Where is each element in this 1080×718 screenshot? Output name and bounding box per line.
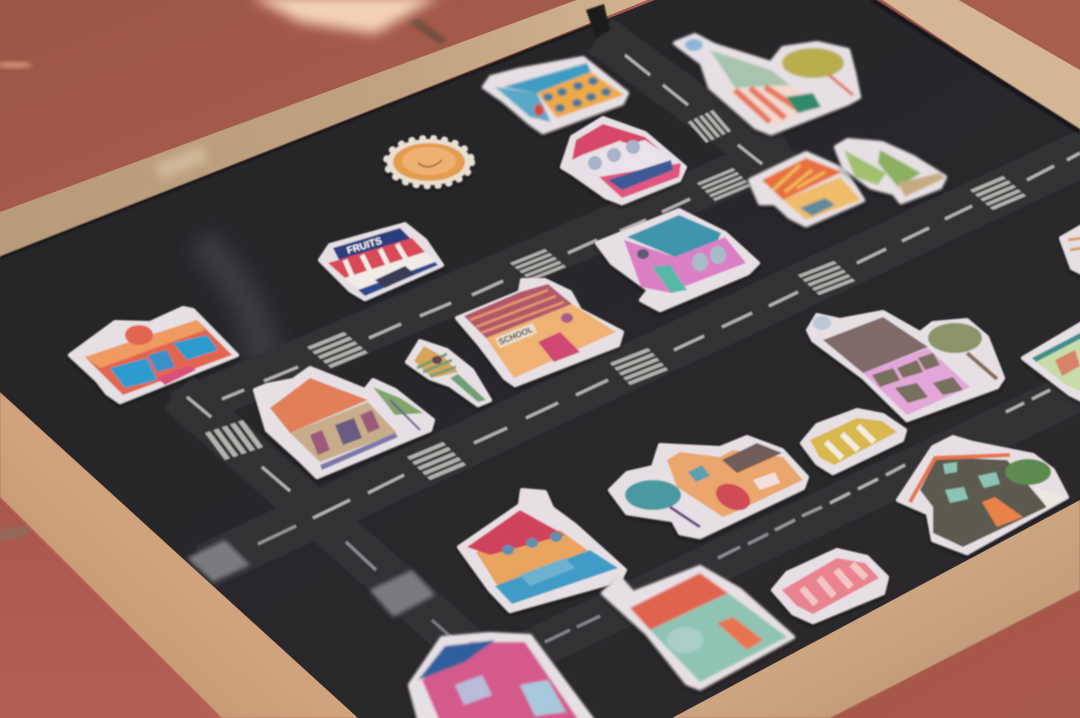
sticker: pink house with tree: [808, 312, 1003, 420]
sticker: top red and pink house: [562, 118, 685, 203]
road: upper diagonal: [178, 150, 790, 412]
frame inner shadow and notch: [0, 0, 1080, 258]
sticker label: FRUITS: FRUITS: [346, 236, 384, 257]
sticker: red roof mint house: [603, 567, 793, 688]
sticker: edge house right: [1023, 323, 1080, 400]
sticker: yellow fence: [802, 410, 905, 473]
sticker: pink fence: [773, 550, 887, 622]
sticker: orange and blue house: [459, 490, 625, 611]
sticker: red shop far left: [70, 308, 237, 402]
road: left cross street: [178, 392, 470, 650]
sticker: edge house top right: [1061, 226, 1080, 273]
lane dashes: [187, 55, 1080, 642]
sticker: orange house with tree: [610, 437, 807, 537]
sticker: fruits shop: [320, 224, 442, 299]
road: middle diagonal: [205, 150, 1080, 567]
chalk smudge: [200, 240, 265, 372]
sticker: dark house with green tree: [898, 437, 1067, 553]
sticker: top blue office: [484, 58, 627, 132]
road: lower diagonal: [500, 385, 1080, 665]
road: top cross street: [600, 35, 790, 175]
sticker: top right house and tree: [675, 35, 859, 133]
sticker: school: [457, 280, 622, 385]
sticker label: SCHOOL: SCHOOL: [497, 324, 534, 347]
sun sticker: [386, 138, 472, 186]
sticker: green trees and fence: [836, 140, 945, 202]
sticker: orange roof house with tree: [255, 368, 433, 477]
sticker: birdhouse: [407, 341, 490, 405]
crosswalks: [187, 110, 1026, 617]
sticker: bottom blue and pink house: [410, 634, 594, 718]
sticker: pink house with teal roof: [597, 210, 758, 310]
sticker: orange awning shop: [750, 153, 863, 225]
road network: [178, 35, 1080, 665]
